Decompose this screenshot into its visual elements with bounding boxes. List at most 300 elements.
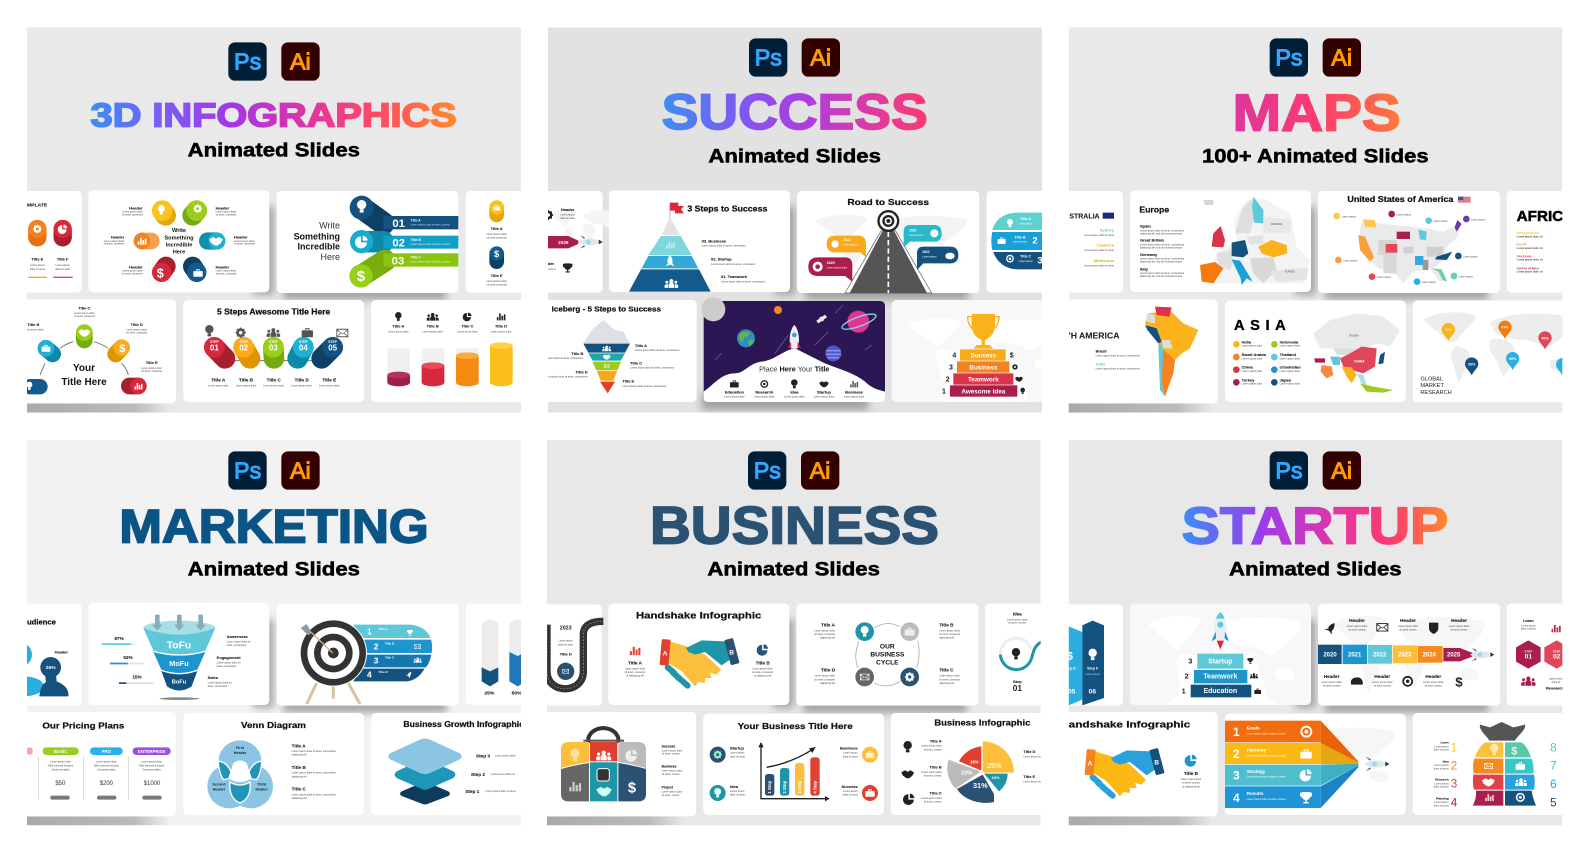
rows: Goals xyxy=(1247,725,1260,730)
slide: 3D cylinder chart: Title A xyxy=(392,324,404,329)
rows: Lorem ipsum dolor sit amet, consec xyxy=(1247,754,1287,757)
step titles: Lorem ipsum dolor xyxy=(236,385,256,388)
title bands: Title A xyxy=(379,627,388,631)
slide: hexagon steps xyxy=(1507,604,1570,706)
legend dots: Lorem ipsum xyxy=(1377,276,1391,279)
slide: template columns: Title F xyxy=(57,256,69,261)
shadow: behind upper slides xyxy=(773,620,967,713)
callout 2020: 2020 xyxy=(827,261,835,265)
side items: dolor sit amet xyxy=(730,794,745,797)
shadow: behind upper slides xyxy=(253,620,447,713)
chart: funnel: MoFu xyxy=(169,659,189,668)
center text xyxy=(870,644,905,667)
ribbon 03: 03 xyxy=(392,255,404,267)
curve xyxy=(1000,638,1042,670)
step numbers and icons xyxy=(942,352,1025,395)
illustration: handshake: B xyxy=(1154,760,1159,767)
icon: rocket xyxy=(1212,612,1229,650)
legend titles: Lorem ipsum dolor sit amet, consectetur xyxy=(292,793,336,796)
step labels: Step 1 xyxy=(465,789,480,794)
labels: Research xyxy=(1435,778,1449,782)
icon: rocket ship xyxy=(1364,757,1389,771)
slide: hexagon steps: dolor sit xyxy=(1552,681,1561,684)
title labels: Lorem ipsum dolor xyxy=(939,675,960,678)
title labels: adipiscing elit xyxy=(939,637,955,640)
chart: funnel: ToFu xyxy=(167,641,191,652)
callout 2020: Lorem ipsum dolor xyxy=(827,266,847,269)
legend dots: Lorem ipsum xyxy=(1342,215,1356,218)
legend: Japan xyxy=(1280,377,1292,382)
icons and labels: Startup xyxy=(817,390,832,395)
slide: template columns: dolor sit amet xyxy=(30,268,45,271)
step labels: Step 3 xyxy=(476,753,490,758)
ribbon 02: Lorem ipsum dolor sit amet, consec xyxy=(411,243,451,246)
step texts: 03. Business xyxy=(702,238,727,243)
chart: funnel: BoFu xyxy=(172,679,187,685)
ribbon 03: $ xyxy=(357,269,365,285)
slide: hexagon steps: Learn xyxy=(1523,618,1534,623)
timeline icons: $ xyxy=(1455,675,1463,690)
text block: MARKET xyxy=(1420,383,1444,389)
title: 3D INFOGRAPHICS xyxy=(91,97,457,134)
map: South America xyxy=(1145,307,1198,397)
list: Sydney xyxy=(1100,228,1115,233)
rows xyxy=(1225,721,1321,808)
title labels: Title C xyxy=(930,791,942,796)
labels: sit amet, consectet xyxy=(74,315,95,318)
slide: vertical pills: Lorem ipsum dolor xyxy=(486,233,507,236)
list: Lorem ipsum dolor sit xyxy=(1517,271,1543,274)
legend: Lorem ipsum dolor xyxy=(1280,383,1300,386)
labels: Lorem ipsum dolor xyxy=(141,367,162,370)
chart: column bars: 25% xyxy=(484,691,495,697)
list: Lorem ipsum dolor sit amet, consectetur xyxy=(1140,258,1184,261)
slide: 3D cylinder chart: Lorem ipsum dolor xyxy=(422,331,443,334)
labels: Idea xyxy=(1443,759,1449,763)
labels: Title E xyxy=(622,379,635,384)
legend dots: Lorem ipsum xyxy=(1459,275,1473,278)
icon: Photoshop logo xyxy=(1270,38,1308,77)
head icon: 26% xyxy=(46,665,56,671)
right item: Title B xyxy=(756,660,770,665)
labels: Title D xyxy=(576,369,588,374)
step 05 xyxy=(322,337,343,358)
callout 2023: 2023 xyxy=(909,228,917,232)
left item xyxy=(625,647,646,678)
list: Lorem ipsum dolor sit amet, consectetur xyxy=(1140,229,1184,232)
step 03 xyxy=(263,337,284,358)
planet with ring xyxy=(840,311,878,333)
heading: Business Infographic xyxy=(934,717,1031,727)
slide: rocket funnel rows xyxy=(1225,714,1406,815)
title labels: Title A xyxy=(930,738,942,743)
list: SOUTH AFRICA xyxy=(1517,266,1540,270)
list: Spain xyxy=(1140,223,1151,228)
list xyxy=(1084,228,1115,267)
list: Lorem ipsum dolor sit amet, consectetur xyxy=(1096,367,1140,370)
slide: vertical pills xyxy=(466,191,521,292)
pill: yellow bulb xyxy=(152,200,173,221)
title labels: Lorem ipsum dolor xyxy=(1023,755,1044,758)
slide: template columns: Title E xyxy=(31,256,44,261)
plans: Nibh euismod tincidunt xyxy=(94,765,119,768)
legend titles: adipiscing elit xyxy=(292,797,307,800)
numbers: 7 xyxy=(1550,760,1557,773)
rows: Lorem ipsum dolor sit amet, consec xyxy=(1247,732,1287,735)
map pins: 33% xyxy=(1468,362,1476,366)
slide: target with arrow xyxy=(277,604,458,706)
center text: Here xyxy=(173,250,185,256)
map: Asia: CHINA xyxy=(1354,360,1365,364)
cycle diagram xyxy=(855,622,919,686)
rows: Lorem ipsum dolor sit amet, consec xyxy=(1247,776,1287,779)
hexagon 01: 01 xyxy=(1525,654,1532,661)
icon: Illustrator logo: Ai xyxy=(810,458,830,484)
list: adipiscing elit, sed do eiusmod tempor xyxy=(1140,232,1182,235)
slide: Australia: STRALIA xyxy=(1069,213,1100,220)
labels: Title D xyxy=(131,322,143,327)
icon: Illustrator logo: Ai xyxy=(1331,458,1352,484)
step 04 xyxy=(293,337,314,358)
step labels: Lorem ipsum dolor xyxy=(495,754,516,757)
text block: RESEARCH xyxy=(1420,390,1452,396)
icons and labels: Research xyxy=(755,390,774,395)
hexagon 02: 02 xyxy=(1553,654,1561,661)
title: STARTUP xyxy=(1182,498,1448,556)
icon: flag xyxy=(670,203,684,218)
labels xyxy=(539,343,679,388)
labels: Title C xyxy=(78,305,91,310)
title labels: adipiscing elit xyxy=(939,682,955,685)
plans: BASIC xyxy=(54,749,67,754)
step titles: Title A xyxy=(211,378,226,383)
rows: Lorem ipsum dolor sit amet, consec xyxy=(1247,798,1287,801)
map: Europe: RUSSIAN xyxy=(1271,223,1282,226)
header labels: Header xyxy=(216,264,230,269)
icons and labels: Lorem ipsum dolor xyxy=(814,396,834,399)
slide: semicircle titles: Lorem ipsum xyxy=(1018,260,1033,263)
list: Italy xyxy=(1140,266,1149,271)
heading: 3 Steps to Success xyxy=(687,205,768,214)
timeline headers: sit amet consec xyxy=(1348,629,1366,632)
slide: hexagon steps: Lorem ipsum xyxy=(1549,678,1563,681)
timeline bars: 2022 xyxy=(1373,653,1387,659)
stair bars: Startup xyxy=(1208,658,1233,665)
center title: Your xyxy=(73,363,95,374)
icons and labels: Lorem ipsum dolor xyxy=(784,396,805,399)
slide: road timeline: Lorem ipsum xyxy=(558,639,573,642)
title: BUSINESS xyxy=(650,497,939,556)
icon: Photoshop logo xyxy=(1270,451,1308,490)
slide: road timeline xyxy=(535,604,603,706)
plans: Consectet adipis xyxy=(142,769,162,772)
map: USA xyxy=(1358,219,1462,283)
title: MAPS xyxy=(1233,85,1401,143)
icon: Illustrator logo: Ai xyxy=(810,45,831,71)
pill: green handshake xyxy=(76,324,93,341)
legend dots: Lorem ipsum xyxy=(1343,259,1358,262)
chart: pie: 31% xyxy=(973,781,988,790)
subtitle: Animated Slides xyxy=(188,141,360,162)
rows: 4 xyxy=(1233,791,1240,805)
legend: Lorem ipsum dolor xyxy=(1242,345,1262,348)
labels: sit amet, consec xyxy=(662,794,680,797)
panel: Success xyxy=(535,27,1060,413)
slide: rocket 2026: der xyxy=(548,261,555,266)
icon: Photoshop logo xyxy=(228,451,267,490)
step bars: Awesome Idea xyxy=(961,388,1006,395)
icons and labels: Business xyxy=(845,390,864,395)
slide: space title xyxy=(701,297,885,402)
heading: Handshake Infographic xyxy=(636,611,761,621)
panel: Maps xyxy=(1050,27,1575,413)
slide: vertical pills: sit amet consectet xyxy=(487,283,507,286)
title labels: Lorem ipsum dolor xyxy=(921,771,942,774)
ribbon 01: Title A xyxy=(411,219,421,223)
illustration: handshake: B xyxy=(729,650,734,657)
slide: ribbon columns: 05 xyxy=(1068,689,1076,696)
legend titles: Lorem ipsum dolor sit amet, consectetur xyxy=(292,750,336,753)
title labels: sit amet, consec xyxy=(924,748,942,751)
slide: template columns xyxy=(27,191,82,292)
plans: Lorem ipsum dolor xyxy=(50,761,71,764)
title labels: Title A xyxy=(821,622,836,627)
pill: orange dollar: $ xyxy=(119,343,126,355)
list: MADAGASCAR xyxy=(1517,231,1539,235)
subtitle: Animated Slides xyxy=(1229,559,1402,580)
list xyxy=(1140,223,1184,278)
target xyxy=(300,619,367,687)
slide: iceberg xyxy=(535,300,697,402)
icon: target xyxy=(877,210,899,232)
list: Great Britain xyxy=(1140,238,1165,243)
numbers and icons xyxy=(1182,657,1261,695)
icon: Illustrator logo xyxy=(281,451,320,490)
funnel labels: Lorem ipsum dolor sit xyxy=(217,662,241,665)
funnel labels: amet, consectetur xyxy=(217,665,237,668)
shadow: strip at panel bottom xyxy=(27,403,170,413)
moon xyxy=(701,297,725,321)
step numbers and icons: 4 xyxy=(952,352,956,359)
funnel labels: amet, consectetur xyxy=(208,685,228,688)
step labels xyxy=(465,753,516,794)
legend titles xyxy=(292,743,336,800)
pill: navy bulb xyxy=(26,382,40,390)
timeline bars: 2024 xyxy=(1423,653,1437,659)
slide: 3D cylinder chart: Lorem ipsum dolor xyxy=(388,331,409,334)
slide: South America xyxy=(1050,299,1218,403)
plans: Lorem ipsum dolor xyxy=(96,761,117,764)
timeline headers: Header xyxy=(1349,618,1365,623)
funnel labels xyxy=(208,634,251,688)
heading: Our Pricing Plans xyxy=(42,721,125,731)
heading: ASIA xyxy=(1234,318,1286,334)
list: Lorem ipsum dolor sit amet, consectetur xyxy=(1140,272,1184,275)
left item: ut adipiscing elit xyxy=(626,675,644,678)
labels: sit amet, consectet xyxy=(126,332,147,335)
labels: Success xyxy=(662,744,675,748)
timeline bars: 2021 xyxy=(1348,653,1362,659)
center text: Something xyxy=(164,235,194,241)
timeline headers: Header xyxy=(1451,618,1467,623)
side items: Lorem ipsum xyxy=(843,790,858,793)
header labels: sit amet, consectet xyxy=(216,213,237,216)
white hills xyxy=(704,348,885,402)
labels: Lorem ipsum dolor sit amet, consectetur xyxy=(635,349,679,352)
plans: Lorem ipsum dolor xyxy=(141,761,162,764)
list: EGYPT xyxy=(1517,243,1527,247)
callout 2023 xyxy=(904,225,942,247)
center text: CYCLE xyxy=(876,660,899,667)
step texts: 02. Startup xyxy=(711,256,732,261)
slide: marketing funnel xyxy=(88,603,269,705)
header labels: Lorem ipsum dolor xyxy=(122,270,143,273)
rows: Strategy xyxy=(1247,769,1266,774)
step numbers and icons: 3 xyxy=(949,364,953,371)
slide: handshake infographic xyxy=(608,604,789,705)
ribbon 01: 01 xyxy=(392,218,405,230)
icon: Photoshop logo xyxy=(228,42,267,81)
stair bars: Education xyxy=(1203,688,1237,695)
trophy xyxy=(968,314,999,349)
slide: 3D cylinder chart: Title B xyxy=(427,324,439,329)
slide: Venn diagram xyxy=(183,713,364,815)
slide: vertical pills: sit amet consectet xyxy=(487,236,507,239)
shadow: strip at panel bottom xyxy=(27,816,170,825)
plans: Nibh euismod tincidunt xyxy=(139,765,165,768)
slide: target audience: udience xyxy=(27,618,56,627)
slide: handshake blue xyxy=(1050,712,1218,816)
numbers: 5 xyxy=(1550,796,1557,809)
slide: vertical pills: Title A xyxy=(491,226,503,231)
center text: BUSINESS xyxy=(870,652,905,659)
chart: step bars: 3 Step xyxy=(797,780,802,794)
list: Lorem ipsum dolor sit amet xyxy=(1084,249,1114,252)
hexagon 01: STEP xyxy=(1524,649,1532,653)
icons and labels: Lorem ipsum dolor xyxy=(724,396,745,399)
text block: Here xyxy=(321,252,340,262)
timeline bars: 2023 xyxy=(1398,653,1412,659)
plans: Consectet adipis xyxy=(51,769,71,772)
center title xyxy=(62,364,106,385)
slide: ribbon columns: $ xyxy=(1067,651,1073,663)
ribbon 01: Lorem ipsum dolor sit amet, consec xyxy=(411,224,451,227)
slide: idea steps: Idea xyxy=(1013,612,1022,617)
labels xyxy=(23,305,162,373)
plans: $1000 xyxy=(144,781,161,787)
step 01: 01 xyxy=(210,343,219,352)
labels: Title A xyxy=(635,343,647,348)
legend: Thailand xyxy=(1280,352,1297,357)
labels: Lorem ipsum dolor xyxy=(126,329,147,332)
slide: United States of America xyxy=(1318,191,1500,293)
text block: GLOBAL xyxy=(1420,376,1443,382)
chart: Venn: Header xyxy=(234,751,247,755)
illustration: handshake xyxy=(660,638,740,686)
icons and labels: Education xyxy=(725,390,745,395)
pill: red chart xyxy=(129,378,146,394)
title: MARKETING xyxy=(119,499,429,552)
slide: template columns: Lorem ipsum xyxy=(30,264,45,267)
slide: template columns: dolor sit amet xyxy=(55,268,70,271)
timeline headers: Lorem ipsum dolor xyxy=(1423,681,1444,684)
step titles: Title E xyxy=(322,378,336,383)
step labels: Lorem ipsum dolor sit xyxy=(491,773,515,776)
callout 2021: Lorem ipsum xyxy=(922,256,937,259)
step 02: 02 xyxy=(239,343,249,352)
pill: navy briefcase xyxy=(187,263,206,282)
numbers: 6 xyxy=(1550,778,1557,791)
plans: Consectet adipis xyxy=(97,769,116,772)
timeline headers: sit amet consec xyxy=(1323,685,1341,688)
side items: dolor sit amet xyxy=(843,755,858,758)
percentage bars: 87% xyxy=(114,636,125,641)
labels: Lorem ipsum dolor sit amet, consectetur xyxy=(539,357,584,360)
subtitle: 100+ Animated Slides xyxy=(1202,147,1429,168)
callout 2020 xyxy=(808,257,852,282)
title labels: Title D xyxy=(821,668,836,673)
pill: orange dollar xyxy=(113,339,130,356)
slide: three ribbon steps xyxy=(277,191,458,293)
right item: sit amet, consectet xyxy=(752,671,773,674)
title B item: Lorem ipsum dolor xyxy=(1181,778,1201,781)
chart: step bars xyxy=(758,742,830,801)
step 04: 04 xyxy=(299,343,308,352)
text block: Something xyxy=(294,231,340,241)
slide: semicircle titles: Title B xyxy=(1014,235,1026,239)
icon: Illustrator logo xyxy=(1323,38,1361,77)
plans: ENTERPRISE xyxy=(138,749,166,754)
legend titles: Title A xyxy=(292,743,306,748)
plans: $200 xyxy=(100,781,114,787)
map: Asia: RUSSIA xyxy=(1349,334,1359,337)
timeline headers: Lorem ipsum dolor xyxy=(1372,681,1393,684)
ribbon 01 xyxy=(350,196,458,230)
rows: Planning xyxy=(1247,748,1266,753)
labels: Lorem ipsum dolor sit amet, consectetur xyxy=(630,367,674,370)
slide: trophy stairs xyxy=(892,300,1060,402)
side items: dolor sit amet xyxy=(843,794,858,797)
text block xyxy=(1420,376,1452,396)
text block: Incredible xyxy=(298,242,340,252)
numbers: 2 xyxy=(1451,759,1457,772)
right item: Lorem ipsum dolor xyxy=(752,667,773,670)
slide: road timeline: Title D xyxy=(560,652,572,657)
center text: Write xyxy=(172,228,186,234)
list: Canberra xyxy=(1096,243,1115,248)
timeline headers: Header xyxy=(1324,674,1340,679)
labels: Lorem ipsum xyxy=(1434,782,1449,785)
shadow: behind upper slides xyxy=(1295,207,1488,300)
right item: ut adipiscing elit xyxy=(754,675,772,678)
labels: Title B xyxy=(571,351,583,356)
slide: semicircle titles: 3 xyxy=(1037,255,1043,265)
list: Lorem ipsum dolor sit xyxy=(1517,235,1543,238)
percentage bars: 15% xyxy=(132,675,143,680)
slide: target audience xyxy=(3,604,82,706)
title B item xyxy=(1181,755,1201,788)
callout 2023: Lorem ipsum xyxy=(909,234,923,237)
plans xyxy=(38,747,171,800)
rows: 3 xyxy=(1233,769,1240,783)
slide: rocket 2026: dolor sit amet xyxy=(560,217,575,220)
header labels: sit amet, consectet xyxy=(122,213,143,216)
side items: Startup xyxy=(730,746,745,751)
legend dots: Lorem ipsum xyxy=(1397,213,1411,216)
text block xyxy=(294,221,340,262)
icon: mail badge xyxy=(557,663,574,680)
chart: pie: 10% xyxy=(992,775,1000,780)
